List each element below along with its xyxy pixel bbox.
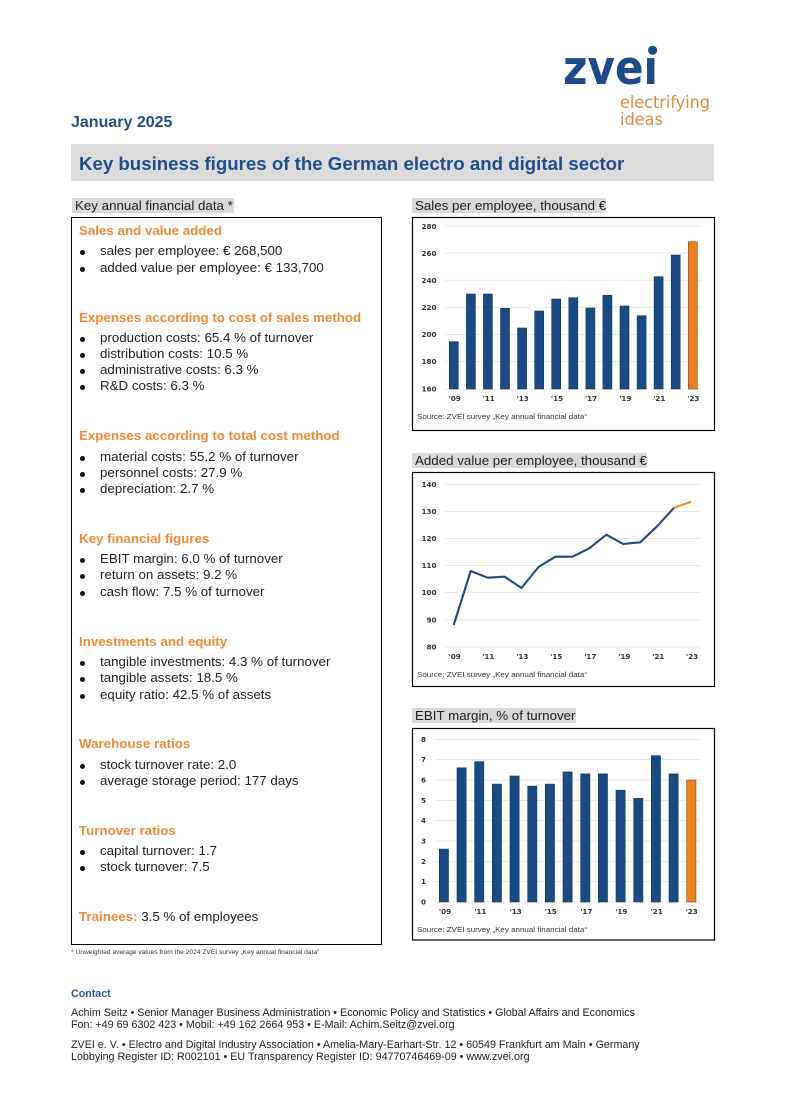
section: investments and equity: tangible assets: 18.5 % bbox=[100, 670, 238, 685]
bar chart: EBIT margin: '17 bbox=[580, 907, 592, 916]
panel: key annual financial data bbox=[71, 217, 382, 944]
section: turnover ratios: stock turnover: 7.5 bbox=[100, 859, 210, 874]
heading: sales per employee: Sales per employee, thousand € bbox=[415, 198, 606, 213]
bar chart: EBIT margin bbox=[412, 728, 716, 941]
bar chart: EBIT margin: Source: ZVEI survey „Key annual financial data“ bbox=[417, 925, 588, 934]
heading: key annual financial data: Key annual financial data * bbox=[75, 198, 233, 213]
bar chart: sales per employee: '17 bbox=[585, 394, 597, 403]
section: turnover ratios: Turnover ratios bbox=[79, 823, 176, 838]
heading: added value per employee: Added value per employee, thousand € bbox=[415, 453, 647, 468]
date: January 2025 bbox=[71, 114, 172, 131]
bar chart: sales per employee: Source: ZVEI survey „Key annual financial data“ bbox=[417, 412, 588, 421]
bar chart: EBIT margin: '13 bbox=[510, 907, 522, 916]
bar chart: sales per employee: '09 bbox=[449, 394, 461, 403]
section: expenses according to cost of sales method: distribution costs: 10.5 % bbox=[100, 346, 248, 361]
section: key financial figures: Key financial figures bbox=[79, 531, 209, 546]
line chart: added value per employee bbox=[412, 472, 716, 688]
section: investments and equity: tangible investments: 4.3 % of turnover bbox=[100, 654, 330, 669]
section: sales and value added: sales per employee: € 268,500 bbox=[100, 243, 282, 258]
bar chart: sales per employee: 160 bbox=[421, 384, 436, 394]
bar chart: EBIT margin: '15 bbox=[545, 907, 557, 916]
line chart: added value per employee: 140 bbox=[421, 480, 436, 489]
section: key financial figures bbox=[79, 531, 283, 599]
line chart: added value per employee: 120 bbox=[421, 534, 436, 543]
contact person bbox=[71, 1007, 635, 1031]
bar chart: sales per employee: 200 bbox=[421, 330, 436, 339]
contact person: Achim Seitz • Senior Manager Business Administration • Economic Policy and Statistics • Global Affairs and Economics bbox=[71, 1007, 635, 1019]
line chart: added value per employee: 80 bbox=[426, 642, 436, 652]
bar chart: sales per employee: 240 bbox=[421, 276, 436, 285]
section: warehouse ratios bbox=[79, 736, 299, 788]
footnote: * Unweighted average values from the 2024 ZVEI survey „Key annual financial data“ bbox=[71, 949, 319, 956]
section: sales and value added bbox=[79, 223, 324, 275]
bar chart: EBIT margin: '23 bbox=[686, 907, 698, 916]
bar chart: EBIT margin: 8 bbox=[421, 735, 426, 744]
line chart: added value per employee: '17 bbox=[584, 652, 596, 661]
section: sales and value added: Sales and value added bbox=[79, 223, 222, 238]
section: expenses according to cost of sales method: Expenses according to cost of sales method bbox=[79, 310, 361, 325]
line chart: added value per employee: '13 bbox=[516, 652, 528, 661]
bar chart: EBIT margin: 6 bbox=[421, 776, 426, 784]
bar chart: EBIT margin: 1 bbox=[421, 877, 426, 886]
bar chart: EBIT margin: '09 bbox=[439, 907, 451, 916]
bar chart: EBIT margin: '11 bbox=[474, 907, 486, 916]
section: sales and value added: added value per employee: € 133,700 bbox=[100, 260, 324, 275]
bar chart: sales per employee: '15 bbox=[551, 394, 563, 403]
heading: EBIT margin: EBIT margin, % of turnover bbox=[415, 708, 576, 723]
bar chart: EBIT margin: '19 bbox=[615, 907, 627, 916]
logo: zvei electrifying ideas: ideas bbox=[620, 110, 663, 129]
section: expenses according to total cost method bbox=[79, 428, 340, 496]
section: investments and equity: equity ratio: 42.5 % of assets bbox=[100, 687, 271, 702]
section: expenses according to total cost method: depreciation: 2.7 % bbox=[100, 481, 214, 496]
logo: zvei electrifying ideas: electrifying bbox=[620, 93, 710, 112]
section: expenses according to total cost method: material costs: 55.2 % of turnover bbox=[100, 449, 299, 464]
line chart: added value per employee: 90 bbox=[426, 616, 436, 624]
line chart: added value per employee: '21 bbox=[652, 652, 664, 661]
bar chart: sales per employee: '13 bbox=[517, 394, 529, 403]
section: investments and equity: Investments and equity bbox=[79, 634, 227, 649]
section: warehouse ratios: average storage period: 177 days bbox=[100, 773, 299, 788]
contact person: Fon: +49 69 6302 423 • Mobil: +49 162 2664 953 • E-Mail: Achim.Seitz@zvei.org bbox=[71, 1019, 455, 1031]
line chart: added value per employee: 110 bbox=[421, 561, 436, 570]
bar chart: EBIT margin: '21 bbox=[651, 907, 663, 916]
bar chart: sales per employee: '23 bbox=[687, 394, 699, 403]
section: expenses according to cost of sales method bbox=[79, 310, 361, 393]
section: investments and equity bbox=[79, 634, 330, 702]
bar chart: EBIT margin: 7 bbox=[421, 755, 426, 764]
section: expenses according to cost of sales method: R&D costs: 6.3 % bbox=[100, 378, 204, 393]
section: warehouse ratios: stock turnover rate: 2.0 bbox=[100, 757, 236, 772]
bar chart: sales per employee: 180 bbox=[421, 357, 436, 366]
line chart: added value per employee: '15 bbox=[550, 652, 562, 661]
bar chart: sales per employee: '19 bbox=[619, 394, 631, 403]
logo: zvei electrifying ideas bbox=[563, 41, 710, 129]
line chart: added value per employee: '19 bbox=[618, 652, 630, 661]
organisation details: ZVEI e. V. • Electro and Digital Industry Association • Amelia-Mary-Earhart-Str. 12 • 60549 Frankfurt am Main • Germany bbox=[71, 1039, 640, 1051]
bar chart: EBIT margin: 5 bbox=[421, 796, 426, 805]
bar chart: sales per employee: 280 bbox=[421, 222, 436, 231]
logo: zvei electrifying ideas: zvei bbox=[563, 41, 658, 96]
title banner bbox=[71, 144, 714, 181]
section: key financial figures: cash flow: 7.5 % of turnover bbox=[100, 584, 264, 599]
organisation details bbox=[71, 1039, 640, 1063]
section: warehouse ratios: Warehouse ratios bbox=[79, 736, 190, 751]
bar chart: sales per employee: 260 bbox=[421, 249, 436, 258]
section: turnover ratios: capital turnover: 1.7 bbox=[100, 843, 217, 858]
line chart: added value per employee: Source: ZVEI survey „Key annual financial data“ bbox=[417, 670, 588, 679]
line chart: added value per employee: '11 bbox=[482, 652, 494, 661]
contact heading: Contact bbox=[71, 988, 111, 1000]
bar chart: EBIT margin: 3 bbox=[421, 836, 426, 846]
organisation details: Lobbying Register ID: R002101 • EU Transparency Register ID: 94770746469-09 • www.zvei.org bbox=[71, 1051, 530, 1063]
bar chart: sales per employee bbox=[412, 216, 716, 432]
section: key financial figures: return on assets: 9.2 % bbox=[100, 567, 237, 582]
bar chart: sales per employee: '21 bbox=[653, 394, 665, 403]
line chart: added value per employee: 130 bbox=[421, 507, 436, 516]
line chart: added value per employee: '23 bbox=[686, 652, 698, 661]
section: key financial figures: EBIT margin: 6.0 % of turnover bbox=[100, 551, 283, 566]
section: turnover ratios bbox=[79, 823, 217, 874]
section: expenses according to cost of sales method: production costs: 65.4 % of turnover bbox=[100, 330, 313, 345]
bar chart: EBIT margin: 2 bbox=[421, 857, 426, 866]
line chart: added value per employee: '09 bbox=[449, 652, 461, 661]
section: expenses according to cost of sales method: administrative costs: 6.3 % bbox=[100, 362, 259, 377]
title banner: Key business figures of the German electro and digital sector bbox=[79, 153, 624, 174]
bar chart: EBIT margin: 4 bbox=[421, 816, 426, 825]
section: expenses according to total cost method: personnel costs: 27.9 % bbox=[100, 465, 242, 480]
section: trainees: Trainees: 3.5 % of employees bbox=[79, 909, 258, 924]
line chart: added value per employee: 100 bbox=[421, 588, 436, 597]
section: expenses according to total cost method: Expenses according to total cost method bbox=[79, 428, 340, 443]
bar chart: EBIT margin: 0 bbox=[421, 898, 426, 906]
bar chart: sales per employee: '11 bbox=[483, 394, 495, 403]
bar chart: sales per employee: 220 bbox=[421, 303, 436, 312]
